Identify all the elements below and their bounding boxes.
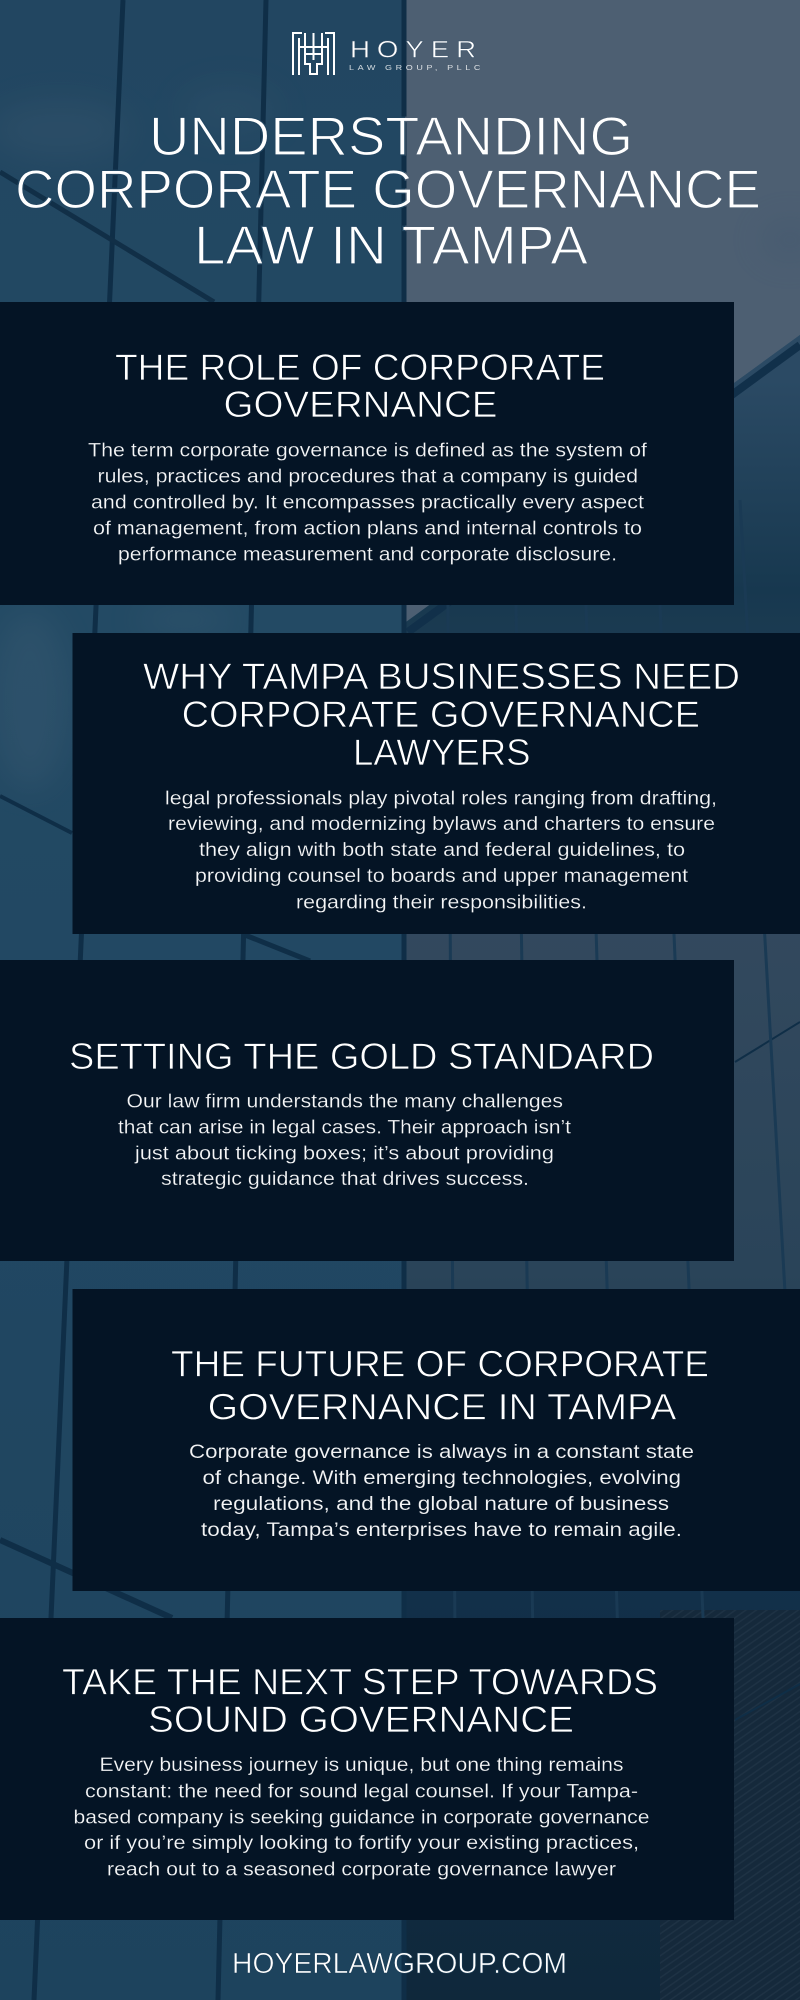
body: future: of change. With emerging technologies, evolving bbox=[202, 1467, 681, 1489]
body: future: regulations, and the global nature of business bbox=[213, 1493, 669, 1515]
body: gold standard bbox=[118, 1091, 572, 1190]
heading: why: WHY TAMPA BUSINESSES NEED bbox=[143, 655, 740, 697]
heading: future bbox=[171, 1342, 709, 1428]
body: gold standard: strategic guidance that drives success. bbox=[161, 1168, 529, 1190]
body: future bbox=[189, 1441, 694, 1541]
heading: role bbox=[115, 346, 605, 425]
title bbox=[15, 105, 761, 276]
body: next step: constant: the need for sound legal counsel. If your Tampa- bbox=[85, 1780, 638, 1802]
title: CORPORATE GOVERNANCE bbox=[15, 158, 761, 220]
body: role: of management, from action plans and internal controls to bbox=[93, 518, 642, 540]
panel: the future of corporate governance bbox=[72, 1289, 800, 1591]
body: gold standard: that can arise in legal cases. Their approach isn’t bbox=[118, 1116, 572, 1138]
icon: logo mark bbox=[293, 33, 334, 75]
body: gold standard: just about ticking boxes; it’s about providing bbox=[134, 1142, 554, 1164]
heading: future: GOVERNANCE IN TAMPA bbox=[208, 1386, 676, 1428]
body: why bbox=[165, 788, 717, 914]
title: LAW IN TAMPA bbox=[194, 214, 588, 276]
heading: role: GOVERNANCE bbox=[224, 383, 498, 425]
body: next step: or if you’re simply looking to fortify your existing practices, bbox=[84, 1832, 639, 1854]
heading: why: LAWYERS bbox=[353, 731, 531, 773]
body: role: performance measurement and corporate disclosure. bbox=[118, 543, 617, 565]
body: why: they align with both state and federal guidelines, to bbox=[199, 839, 685, 861]
title: UNDERSTANDING bbox=[149, 105, 633, 167]
footer: website: HOYERLAWGROUP.COM bbox=[232, 1948, 567, 1980]
panel: the role of corporate governance bbox=[0, 302, 734, 605]
body: role: rules, practices and procedures that a company is guided bbox=[98, 465, 638, 487]
body: why: providing counsel to boards and upper management bbox=[195, 865, 689, 887]
heading: next step bbox=[62, 1661, 658, 1740]
heading: future: THE FUTURE OF CORPORATE bbox=[171, 1342, 709, 1384]
logo wordmark: HOYER bbox=[350, 36, 483, 64]
panel: setting the gold standard bbox=[0, 960, 734, 1261]
body: role bbox=[88, 440, 648, 565]
body: next step bbox=[74, 1754, 650, 1880]
body: next step: based company is seeking guidance in corporate governance bbox=[74, 1807, 650, 1829]
body: future: Corporate governance is always in a constant state bbox=[189, 1441, 694, 1463]
body: role: and controlled by. It encompasses practically every aspect bbox=[91, 492, 645, 514]
body: why: legal professionals play pivotal roles ranging from drafting, bbox=[165, 788, 717, 810]
body: next step: Every business journey is unique, but one thing remains bbox=[100, 1754, 624, 1776]
body: next step: reach out to a seasoned corporate governance lawyer bbox=[107, 1858, 617, 1880]
heading: why bbox=[143, 655, 740, 773]
body: gold standard: Our law firm understands the many challenges bbox=[126, 1091, 563, 1113]
panel: take the next step bbox=[0, 1618, 734, 1920]
heading: why: CORPORATE GOVERNANCE bbox=[182, 693, 700, 735]
heading: gold standard: SETTING THE GOLD STANDARD bbox=[69, 1035, 654, 1077]
logo: Hoyer Law Group bbox=[293, 33, 484, 75]
body: role: The term corporate governance is defined as the system of bbox=[88, 440, 648, 462]
body: why: reviewing, and modernizing bylaws and charters to ensure bbox=[168, 813, 715, 835]
body: future: today, Tampa’s enterprises have to remain agile. bbox=[201, 1519, 682, 1541]
logo tagline: LAW GROUP, PLLC bbox=[349, 63, 484, 72]
heading: next step: SOUND GOVERNANCE bbox=[148, 1698, 574, 1740]
heading: role: THE ROLE OF CORPORATE bbox=[115, 346, 605, 388]
heading: next step: TAKE THE NEXT STEP TOWARDS bbox=[62, 1661, 658, 1703]
panel: why Tampa businesses need lawyers bbox=[72, 633, 800, 934]
body: why: regarding their responsibilities. bbox=[296, 892, 587, 914]
